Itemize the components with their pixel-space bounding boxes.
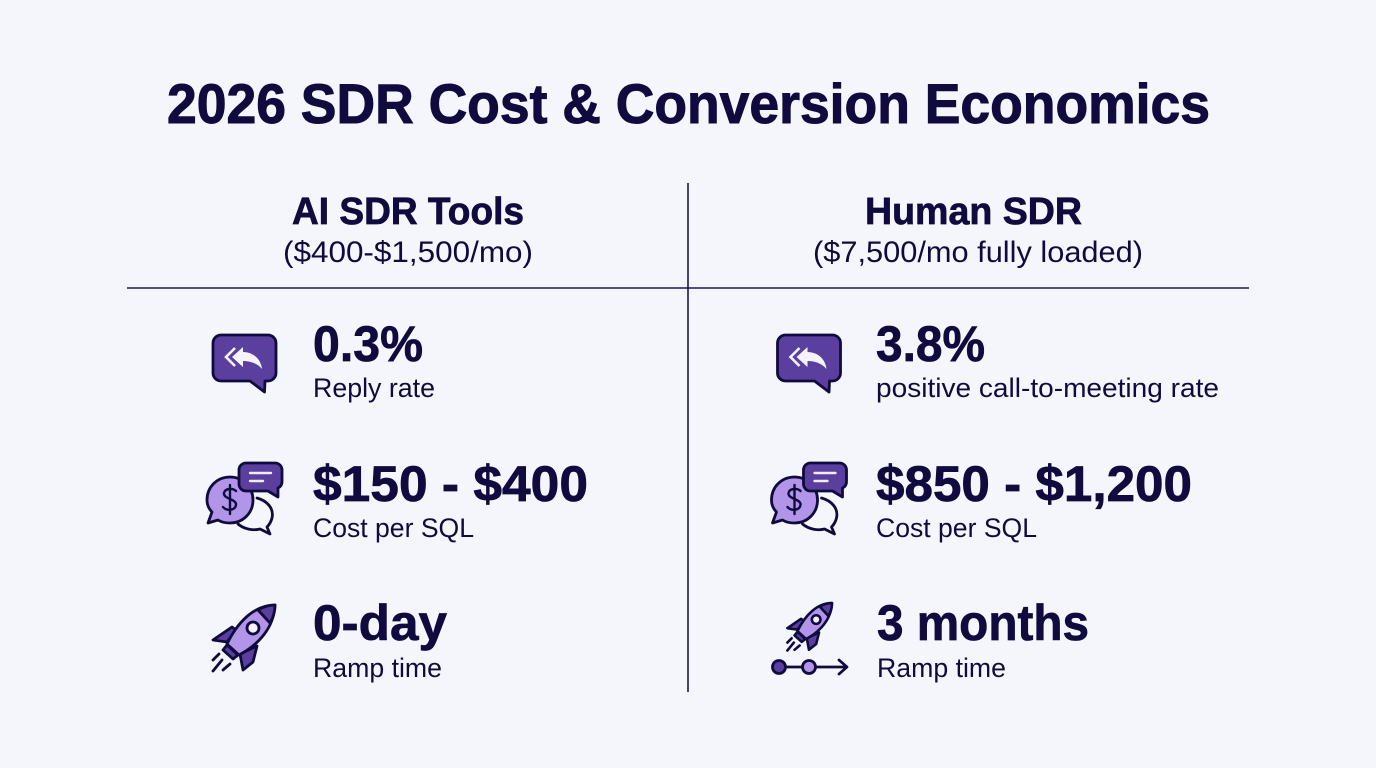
icon: rocket xyxy=(213,605,275,671)
metric: ramp time: 0-day xyxy=(313,595,447,651)
heading: Human SDR: ($7,500/mo fully loaded) xyxy=(813,236,1143,269)
metric: cost per SQL xyxy=(876,456,1192,543)
metric: ramp time: 3 months xyxy=(877,595,1089,651)
icon: reply bubble xyxy=(213,335,276,392)
heading: AI SDR Tools: ($400-$1,500/mo) xyxy=(283,236,533,269)
panel: Human SDR xyxy=(772,191,1219,683)
title: 2026 SDR Cost & Conversion Economics xyxy=(167,72,1210,135)
metric: cost per SQL: Cost per SQL xyxy=(876,513,1037,543)
metric: ramp time: Ramp time xyxy=(877,653,1006,683)
metric: ramp time: Ramp time xyxy=(313,653,442,683)
icon: cost speech bubbles xyxy=(772,463,846,534)
icon: reply bubble xyxy=(778,335,840,392)
metric: call-to-meeting rate: 3.8% xyxy=(876,316,985,372)
metric: reply rate xyxy=(313,316,435,403)
heading: Human SDR: Human SDR xyxy=(865,191,1082,233)
heading: AI SDR Tools: AI SDR Tools xyxy=(292,191,524,233)
metric: call-to-meeting rate: positive call-to-meeting rate xyxy=(876,373,1219,403)
metric: cost per SQL xyxy=(313,456,588,543)
heading: Human SDR xyxy=(813,191,1143,269)
metric: ramp time xyxy=(313,595,447,683)
icon: rocket with timeline xyxy=(772,603,847,674)
metric: cost per SQL: Cost per SQL xyxy=(313,513,474,543)
metric: reply rate: 0.3% xyxy=(313,316,423,372)
metric: reply rate: Reply rate xyxy=(313,373,435,403)
metric: cost per SQL: $850 - $1,200 xyxy=(876,456,1192,512)
metric: cost per SQL: $150 - $400 xyxy=(313,456,588,512)
panel: AI SDR Tools xyxy=(207,191,588,683)
icon: cost speech bubbles xyxy=(207,463,282,534)
metric: call-to-meeting rate xyxy=(876,316,1219,403)
metric: ramp time xyxy=(877,595,1089,683)
heading: AI SDR Tools xyxy=(283,191,533,269)
